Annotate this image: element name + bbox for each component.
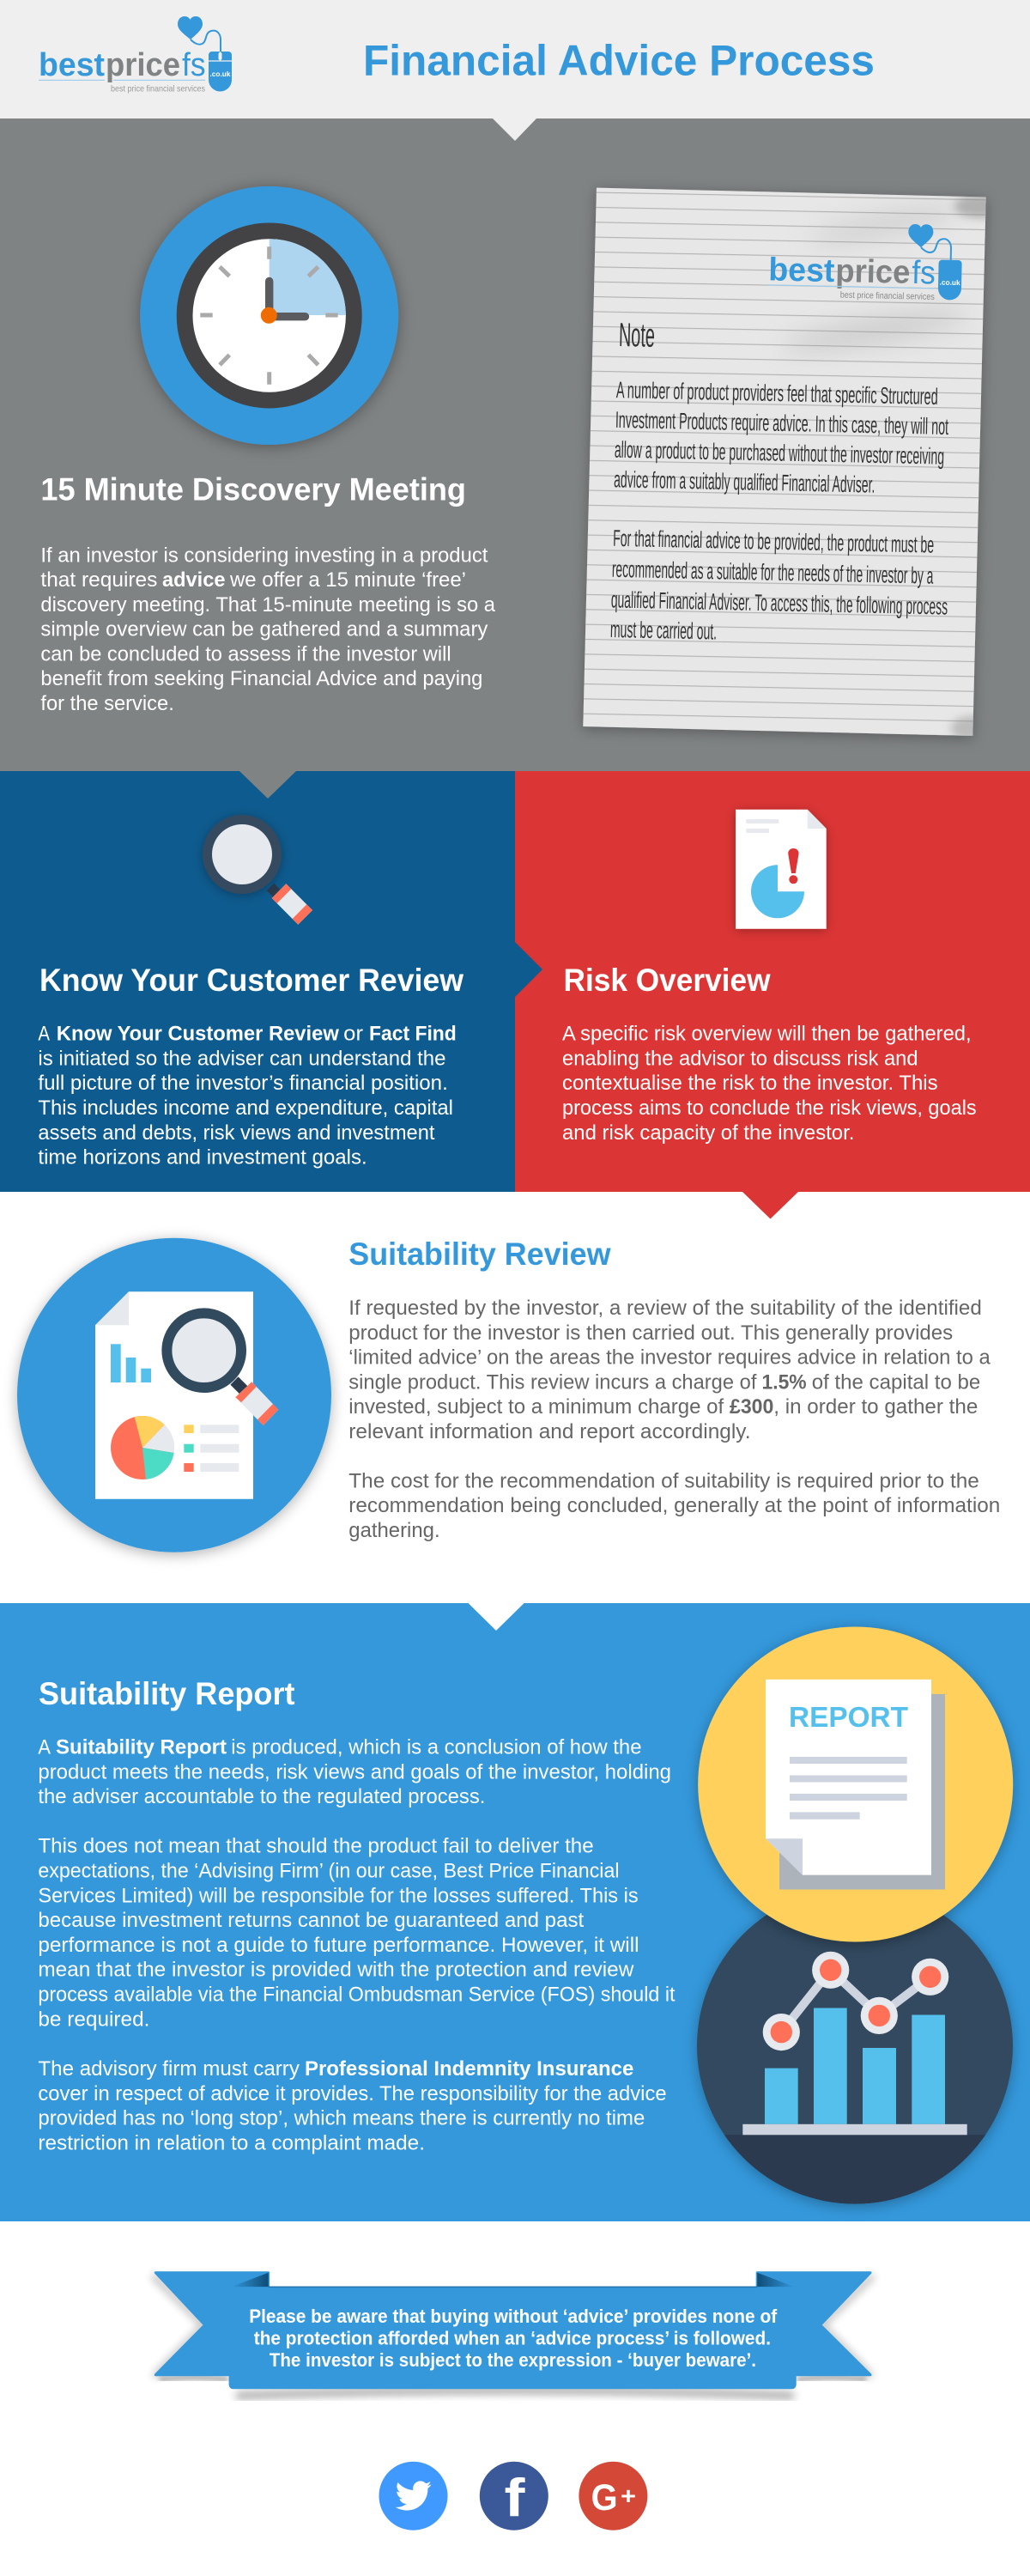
text block: discovery description: simple overview can be gathered and a summary <box>40 618 488 641</box>
text block: know your customer description: full picture of the investor’s financial position. <box>38 1072 448 1095</box>
text block: suitability review description: product for the investor is then carried out. This generally provides <box>348 1321 953 1345</box>
icon: facebook <box>480 2462 548 2530</box>
arrow: risk pointer <box>742 1192 798 1219</box>
logo: note copy: fs <box>912 255 936 291</box>
icon: twitter <box>379 2462 448 2530</box>
text block: suitability report description: be required. <box>38 2008 149 2031</box>
pie chart: mini <box>111 1416 174 1479</box>
logo: bestpricefs <box>39 16 232 94</box>
logo: bestpricefs: best <box>39 47 105 83</box>
logo: note copy: .co.uk <box>940 278 960 287</box>
ribbon callout: buyer beware <box>153 2273 873 2396</box>
text block: know your customer description: This includes income and expenditure, capital <box>38 1097 453 1120</box>
arrow: suitability review pointer <box>469 1603 524 1631</box>
text block: risk description: process aims to conclude the risk views, goals <box>562 1097 977 1120</box>
text block: suitability review description: relevant information and report accordingly. <box>348 1420 750 1443</box>
logo: bestpricefs: .co.uk <box>209 70 231 78</box>
logo: note copy: price <box>835 253 911 291</box>
text block: discovery description: advice <box>162 568 225 592</box>
text: buyer beware warning: The investor is subject to the expression - ‘buyer beware’. <box>270 2349 756 2371</box>
icon: google plus: + <box>621 2482 636 2509</box>
text block: suitability report description: restriction in relation to a complaint made. <box>38 2131 425 2154</box>
icon: facebook: f <box>505 2469 525 2528</box>
text block: suitability review description: gathering. <box>348 1519 440 1542</box>
arrow: header pointer <box>493 118 536 141</box>
icon: report with magnifier <box>17 1238 331 1552</box>
text block: suitability review description: , in order to gather the <box>773 1395 978 1419</box>
icon: google plus <box>579 2462 647 2530</box>
text block: suitability report description: Suitability Report <box>56 1736 227 1759</box>
text block: suitability report description: because investment returns cannot be guaranteed and past <box>38 1909 585 1932</box>
text block: know your customer description: time horizons and investment goals. <box>38 1146 367 1170</box>
text block: suitability report description: Professional Indemnity Insurance <box>305 2057 633 2081</box>
text block: discovery description: can be concluded to assess if the investor will <box>40 642 451 665</box>
text block: risk description: contextualise the risk to the investor. This <box>562 1072 938 1095</box>
heading: note: Note <box>619 317 655 355</box>
icon: magnifying glass <box>203 815 312 925</box>
text: buyer beware warning <box>249 2306 778 2371</box>
bar chart: mini <box>111 1344 151 1382</box>
text: buyer beware warning: the protection afforded when an ‘advice process’ is followed. <box>254 2328 771 2349</box>
text block: suitability report description: cover in respect of advice it provides. The responsibility for the advice <box>38 2082 667 2105</box>
logo: note copy: best price financial services <box>840 290 935 302</box>
icon: report document: REPORT <box>789 1701 908 1733</box>
text block: suitability report description: is produced, which is a conclusion of how the <box>231 1736 642 1759</box>
text block: discovery description <box>40 544 496 715</box>
text block: know your customer description: is initiated so the adviser can understand the <box>38 1047 446 1070</box>
text block: suitability report description: Services Limited) will be responsible for the losses suffered. This is <box>38 1884 639 1907</box>
text block: suitability report description: performance is not a guide to future performance. However, it will <box>38 1934 639 1957</box>
heading: suitability review: Suitability Review <box>348 1236 611 1272</box>
panel: footer <box>0 2221 1030 2576</box>
text block: discovery description: that requires <box>40 568 157 592</box>
logo: note copy <box>768 221 963 303</box>
text block: suitability report description: expectations, the ‘Advising Firm’ (in our case, Best Price Financial <box>38 1860 619 1882</box>
heading: suitability report: Suitability Report <box>39 1676 295 1711</box>
text block: discovery description: benefit from seeking Financial Advice and paying <box>40 667 482 690</box>
panel: suitability review <box>0 1192 1030 1603</box>
text block: know your customer description: assets and debts, risk views and investment <box>38 1121 435 1145</box>
text block: note paragraphs: must be carried out. <box>610 617 717 645</box>
text block: discovery description: for the service. <box>40 692 174 715</box>
text block: know your customer description: or <box>343 1023 363 1046</box>
text block: risk description: enabling the advisor to discuss risk and <box>562 1047 918 1070</box>
text block: suitability review description: £300 <box>730 1395 773 1419</box>
text block: suitability report description: process available via the Financial Ombudsman Service (FOS) should it <box>38 1984 676 2006</box>
text block: suitability report description: A <box>38 1736 51 1759</box>
arrow: discovery pointer <box>239 771 296 799</box>
text block: suitability review description: ‘limited advice’ on the areas the investor requires advice in relation to a <box>348 1346 991 1369</box>
text block: suitability report description: provided has no ‘long stop’, which means there is currently no time <box>38 2107 645 2130</box>
icon: magnifier <box>167 1313 278 1425</box>
text block: suitability review description: If requested by the investor, a review of the suitability of the identified <box>348 1297 982 1320</box>
text block: suitability report description <box>38 1736 676 2154</box>
text block: discovery description: discovery meeting. That 15-minute meeting is so a <box>40 593 496 617</box>
text block: suitability review description: single product. This review incurs a charge of <box>348 1370 757 1394</box>
panel: risk overview <box>515 771 1030 1192</box>
panel: header <box>0 0 1030 118</box>
heading: know your customer review: Know Your Customer Review <box>39 963 464 998</box>
text block: suitability report description: This does not mean that should the product fail to deliver the <box>38 1835 594 1858</box>
text block: know your customer description: Fact Find <box>369 1023 457 1046</box>
text block: know your customer description: Know Your Customer Review <box>57 1023 339 1046</box>
icon: rising bar chart <box>695 1888 1015 2207</box>
icon: google plus: G <box>591 2477 618 2518</box>
heading: 15 minute discovery meeting: 15 Minute Discovery Meeting <box>40 472 466 507</box>
icon: report document <box>698 1626 1013 1942</box>
logo: bestpricefs: price <box>106 47 180 83</box>
text block: suitability review description: recommendation being concluded, generally at the point of information <box>348 1494 1000 1517</box>
panel: handwritten note <box>583 188 1006 740</box>
text block: suitability review description: 1.5% <box>762 1370 807 1394</box>
text block: suitability report description: The advisory firm must carry <box>38 2057 300 2081</box>
text block: suitability review description <box>348 1297 1000 1542</box>
icon: risk document <box>736 810 827 929</box>
heading: risk overview: Risk Overview <box>563 963 771 998</box>
text block: note paragraphs <box>610 377 949 645</box>
icon: clock <box>140 186 398 445</box>
text block: know your customer description: A <box>38 1023 50 1046</box>
text block: know your customer description <box>38 1023 457 1170</box>
text block: suitability review description: of the capital to be <box>812 1370 980 1394</box>
text: buyer beware warning: Please be aware that buying without ‘advice’ provides none of <box>249 2306 778 2327</box>
panel: know your customer review <box>0 771 515 1192</box>
logo: note copy: best <box>768 252 835 289</box>
text block: suitability report description: mean that the investor is provided with the protection and review <box>38 1959 634 1982</box>
text block: risk description: and risk capacity of the investor. <box>562 1121 854 1145</box>
text block: risk description <box>562 1023 977 1145</box>
logo: bestpricefs: best price financial services <box>111 84 205 94</box>
text block: suitability review description: invested, subject to a minimum charge of <box>348 1395 724 1419</box>
legend <box>184 1425 239 1472</box>
title: Financial Advice Process <box>363 36 875 84</box>
text block: suitability report description: product meets the needs, risk views and goals of the investor, holding <box>38 1760 671 1783</box>
arrow: blue panel pointer <box>515 942 542 997</box>
text block: suitability report description: the adviser accountable to the regulated process. <box>38 1785 485 1808</box>
logo: bestpricefs: fs <box>182 47 206 83</box>
panel: 15 minute discovery meeting <box>0 118 1030 771</box>
text block: risk description: A specific risk overview will then be gathered, <box>562 1023 972 1046</box>
text block: discovery description: we offer a 15 minute ‘free’ <box>229 568 466 592</box>
panel: suitability report <box>0 1603 1030 2221</box>
text block: suitability review description: The cost for the recommendation of suitability is required prior to the <box>348 1469 979 1492</box>
text block: discovery description: If an investor is considering investing in a product <box>40 544 488 567</box>
